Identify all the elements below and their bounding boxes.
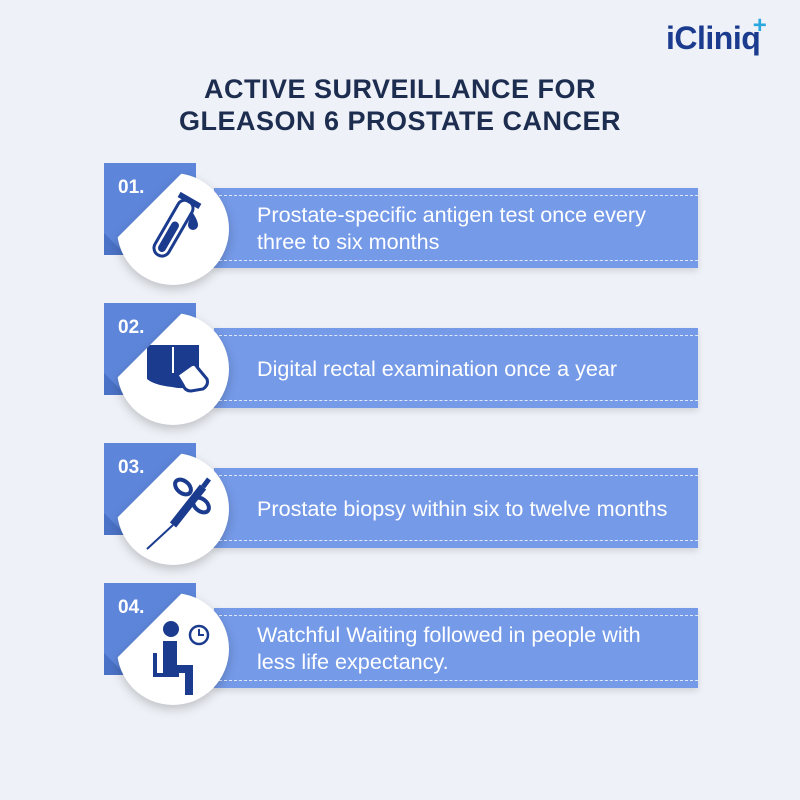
- text block 1: [214, 188, 698, 268]
- icon: biopsy needle: [114, 454, 234, 574]
- icon: waiting person: [114, 594, 234, 714]
- panel: step 3: 03.: [118, 457, 144, 478]
- panel: step 3: [104, 443, 700, 574]
- panel: step 2: 02.: [118, 317, 144, 338]
- text block 2: [214, 328, 698, 408]
- icon: test tube: [114, 174, 234, 294]
- panel: step 4: 04.: [118, 597, 144, 618]
- logo: iCliniq: [666, 20, 760, 56]
- panel: step 1: 01.: [118, 177, 144, 198]
- panel: step 1: [104, 163, 700, 294]
- text block 4: [214, 608, 698, 688]
- text block 3: [214, 468, 698, 548]
- text block 1: Prostate-specific antigen test once every: [257, 202, 646, 227]
- text block 1: three to six months: [257, 229, 439, 254]
- icon: rectal exam: [114, 314, 234, 434]
- text block 2: Digital rectal examination once a year: [257, 356, 617, 380]
- panel: step 2: [104, 303, 700, 434]
- title: [179, 74, 621, 136]
- text block 3: Prostate biopsy within six to twelve months: [257, 496, 667, 520]
- text block 4: Watchful Waiting followed in people with: [257, 622, 641, 647]
- title: ACTIVE SURVEILLANCE FOR: [204, 74, 596, 104]
- text block 4: less life expectancy.: [257, 649, 449, 674]
- logo: +: [753, 12, 766, 39]
- panel: step 4: [104, 583, 700, 714]
- title: GLEASON 6 PROSTATE CANCER: [179, 106, 621, 136]
